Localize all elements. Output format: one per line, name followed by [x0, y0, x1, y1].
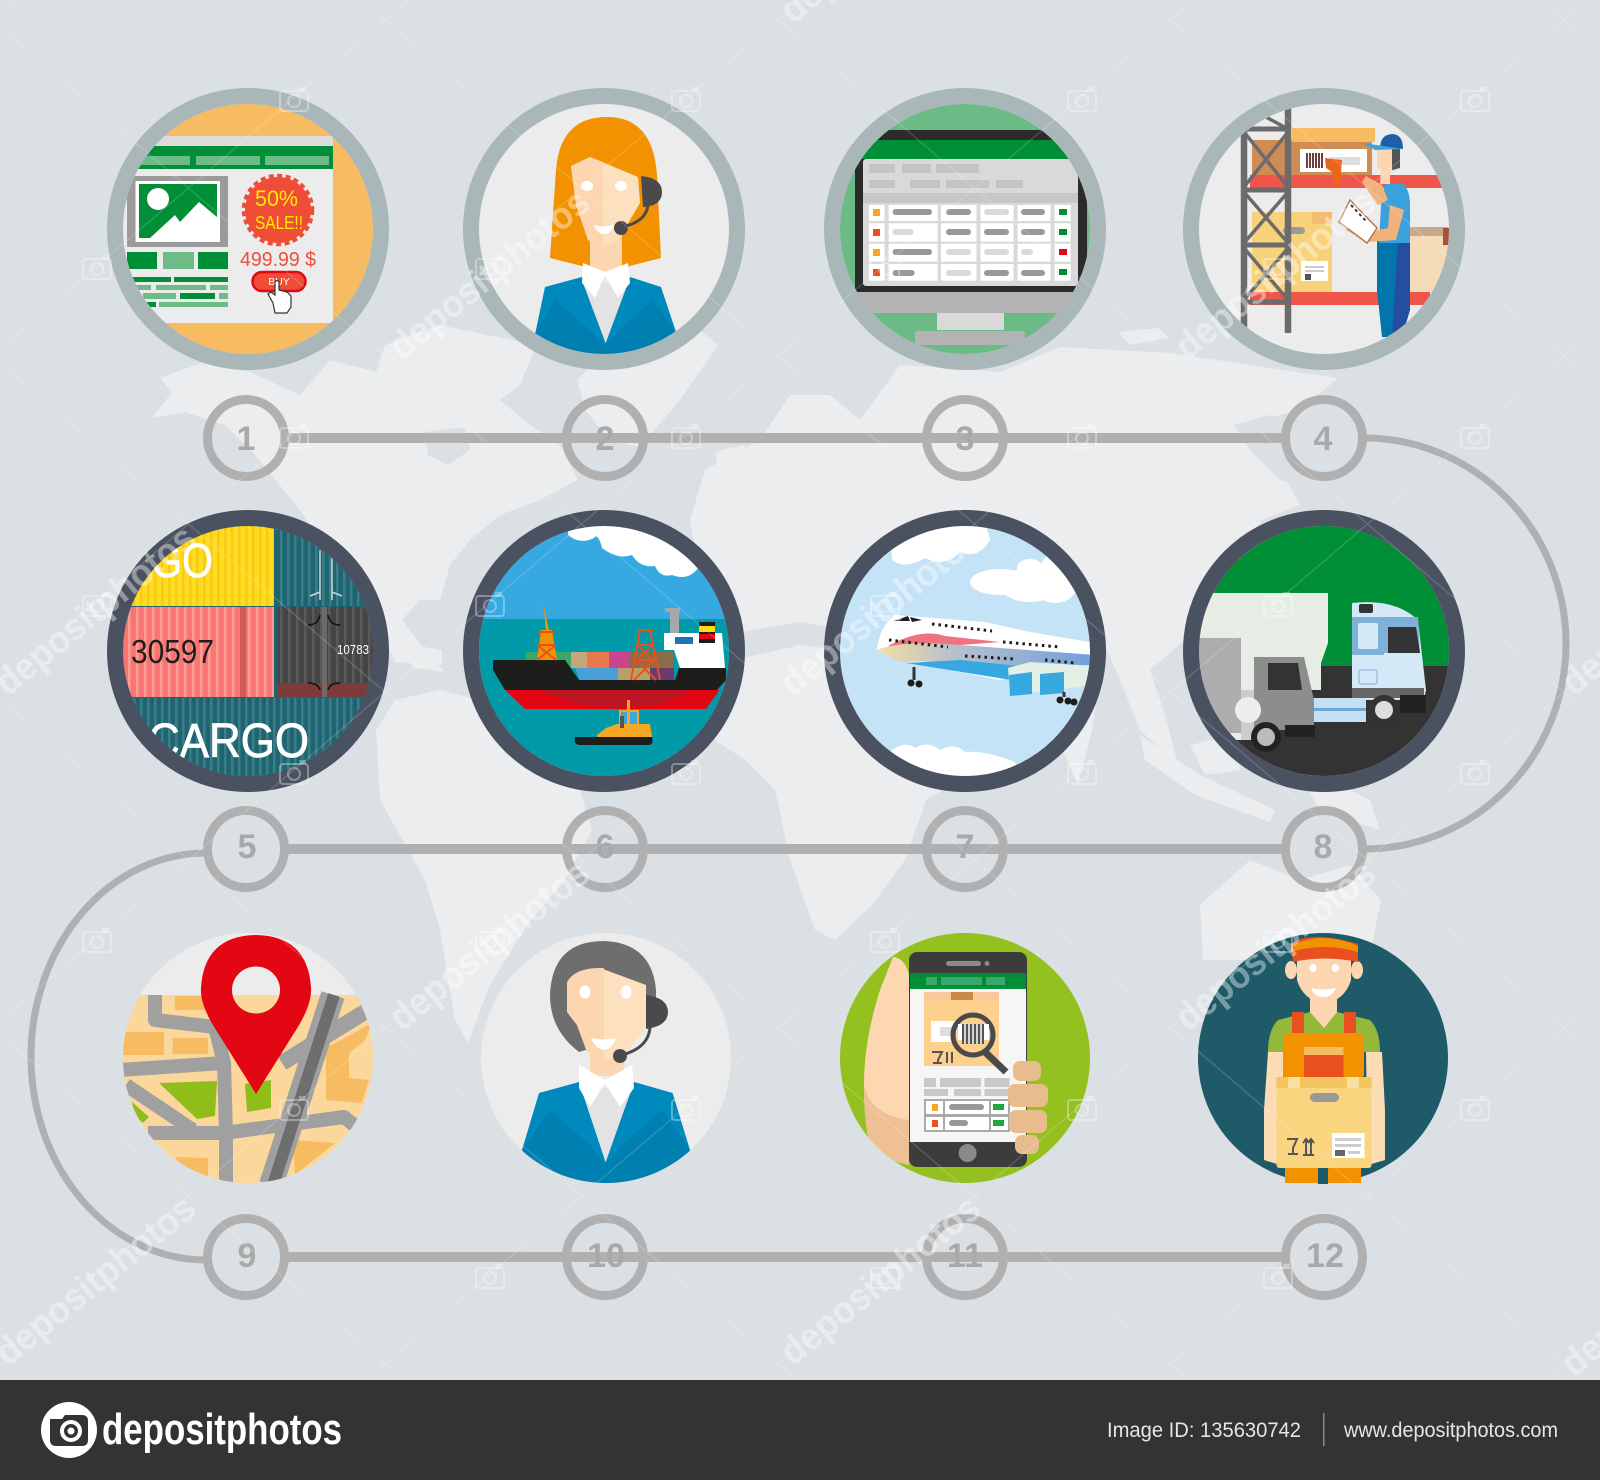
step 5 number: 5	[238, 828, 256, 866]
hand palm	[864, 957, 909, 1165]
clouds	[890, 522, 1077, 780]
hair	[550, 941, 656, 1052]
straps and apron	[1283, 1012, 1364, 1079]
headset	[614, 176, 662, 235]
shirt	[582, 263, 630, 343]
cloud	[568, 525, 700, 577]
box	[1276, 1077, 1372, 1168]
footer logo wordmark: depositphotos	[102, 1405, 342, 1454]
dark container: 10783	[337, 642, 369, 657]
shirt	[579, 1065, 634, 1162]
step 11 number: 11	[947, 1237, 983, 1275]
location pin	[201, 935, 311, 1094]
sale badge: SALE!!	[255, 213, 303, 233]
jacket shading	[522, 1110, 690, 1200]
ears and neck	[1285, 961, 1363, 1028]
price: 499.99 $	[240, 249, 316, 271]
step 9 number	[208, 1218, 284, 1296]
dark container	[277, 607, 377, 697]
connector: right curve from step 4 to step 8	[1364, 438, 1566, 849]
phone	[909, 952, 1027, 1167]
face	[571, 157, 640, 247]
eyes and smile	[581, 181, 627, 234]
sale badge: 50%	[255, 186, 298, 211]
map blocks	[123, 996, 372, 1177]
step 10 number: 10	[587, 1237, 625, 1275]
green areas	[132, 1080, 271, 1123]
step 12 number	[1286, 1218, 1362, 1296]
fingers	[1008, 1061, 1048, 1154]
arms	[1264, 1052, 1385, 1165]
depositphotos text watermarks: depositphotos	[381, 852, 598, 1039]
steel rack	[1244, 105, 1288, 333]
panel 10: male call-centre operator	[470, 930, 740, 1200]
image id: Image ID: 135630742	[1107, 1419, 1301, 1442]
connector: middle row line	[288, 844, 1286, 854]
jacket	[522, 1082, 690, 1200]
step 7 number	[926, 810, 1004, 888]
large truck	[1192, 593, 1426, 740]
panel 8: two delivery trucks	[1190, 518, 1460, 786]
jacket shading	[535, 300, 676, 354]
map inland seas	[425, 415, 1323, 625]
cranes	[537, 603, 660, 680]
teal container top right	[278, 530, 364, 606]
step 3 number: 3	[956, 420, 974, 458]
panel 9: city map with location pin	[120, 930, 380, 1190]
step 2 number: 2	[596, 420, 614, 458]
connector: left curve from step 5 to step 9	[31, 853, 206, 1260]
yellow container	[120, 524, 274, 606]
screen table	[924, 1078, 1010, 1131]
cursor hand	[268, 280, 291, 313]
step 8 number: 8	[1314, 828, 1332, 866]
step 7 number: 7	[956, 828, 974, 866]
shelves	[1250, 175, 1442, 305]
cap	[1291, 937, 1358, 962]
panel 6: container ship at sea	[470, 518, 740, 784]
panel 11: hand holding smartphone with barcode scan	[830, 930, 1100, 1190]
roads	[120, 995, 368, 1190]
connector: top row line	[288, 433, 1286, 443]
airplane	[877, 615, 1095, 706]
step 6 number	[566, 810, 644, 888]
buy button: BUY	[268, 276, 290, 288]
depositphotos text watermarks: depositphotos	[1167, 852, 1384, 1039]
world map	[152, 325, 1381, 1043]
depositphotos text watermarks: depositphotos	[381, 181, 598, 368]
tug boat	[575, 700, 652, 745]
headset	[613, 995, 668, 1063]
depositphotos text watermarks: depositphotos	[1167, 181, 1384, 368]
panel 1: online shop page	[110, 96, 381, 362]
face	[567, 968, 646, 1060]
red container: 30597	[131, 633, 214, 670]
step 9 number: 9	[238, 1237, 256, 1275]
panel 3: computer monitor with status table	[820, 96, 1110, 362]
sale badge	[244, 176, 312, 244]
package on screen	[924, 992, 999, 1066]
step 11 number	[926, 1218, 1004, 1296]
buy button	[252, 272, 306, 291]
browser window	[110, 136, 333, 323]
jacket	[535, 277, 676, 354]
step 8 number	[1286, 810, 1362, 888]
pants	[1285, 1165, 1361, 1184]
step 6 number: 6	[596, 828, 614, 866]
small truck	[1192, 638, 1315, 752]
magnifier	[953, 1015, 1006, 1072]
depositphotos text watermarks: depositphotos	[772, 1187, 989, 1374]
shelf boxes	[1252, 128, 1449, 292]
website: www.depositphotos.com	[1343, 1419, 1558, 1442]
neck	[590, 1040, 624, 1076]
head	[1297, 958, 1351, 1004]
eyes and smile	[1310, 964, 1339, 997]
monitor	[855, 130, 1087, 345]
teal container bottom	[132, 698, 364, 776]
connector: bottom row line	[288, 1252, 1286, 1262]
depositphotos text watermarks: depositphotos	[772, 517, 989, 704]
footer logo icon	[41, 1402, 97, 1458]
panel 7: airplane in the sky	[830, 518, 1100, 790]
step 4 number	[1286, 400, 1362, 476]
footer band	[0, 1380, 1600, 1480]
ship	[493, 603, 726, 709]
hair	[550, 117, 661, 268]
step 5 number	[208, 810, 284, 888]
teal container bottom: CARGO	[148, 715, 309, 768]
panel 2: female call-centre operator	[470, 96, 740, 380]
panel 4: warehouse worker scanning a box	[1190, 96, 1460, 362]
superstructure	[664, 608, 725, 668]
step 2 number	[566, 400, 644, 476]
panel 5: stacked shipping containers	[115, 518, 381, 790]
neck	[590, 235, 622, 271]
worker	[1325, 134, 1410, 337]
footer separator	[1323, 1413, 1324, 1446]
camera watermark icons	[83, 87, 1489, 1288]
eyes and smile	[580, 986, 632, 1050]
step 1 number: 1	[237, 420, 255, 458]
red container	[120, 607, 274, 697]
step 12 number: 12	[1306, 1237, 1344, 1275]
status table	[869, 205, 1071, 281]
panel 12: delivery man carrying a box	[1198, 933, 1448, 1184]
step 3 number	[926, 400, 1004, 476]
step 4 number: 4	[1314, 420, 1333, 458]
yellow container: GO	[151, 535, 213, 588]
shirt	[1268, 1012, 1380, 1052]
step 10 number	[566, 1218, 644, 1296]
step 1 number	[208, 400, 284, 476]
